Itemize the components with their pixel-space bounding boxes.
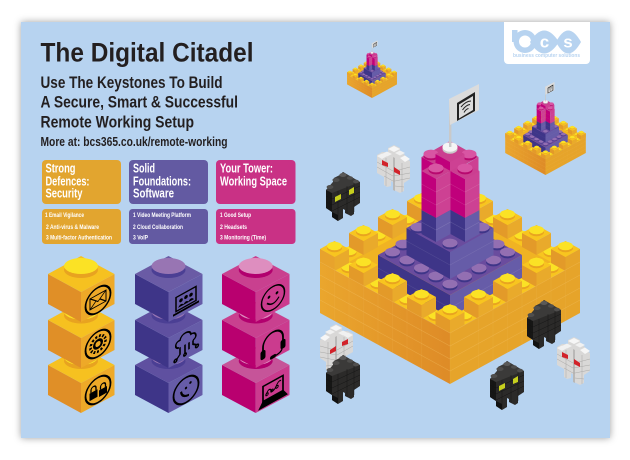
panel: software list: 1 Video Meeting Platform bbox=[133, 213, 191, 219]
panel: security list: 1 Email Vigilance bbox=[45, 213, 85, 219]
panel: security heading: Strong bbox=[46, 162, 76, 176]
small castle: top left bbox=[347, 40, 397, 98]
panel: working space list: 1 Good Setup bbox=[220, 213, 251, 219]
black invader: bottom bbox=[490, 361, 524, 410]
black invader: top left bbox=[326, 172, 360, 221]
main citadel bbox=[320, 84, 580, 384]
purple keystone stack bbox=[135, 256, 202, 413]
subtitle: Use The Keystones To Build bbox=[40, 74, 222, 92]
more-at link: More at: bcs365.co.uk/remote-working bbox=[40, 135, 228, 149]
panel: working space heading bbox=[216, 160, 296, 204]
small castle: right bbox=[505, 82, 586, 175]
black invader: right bbox=[527, 300, 561, 349]
panel: working space list: 3 Monitoring (Time) bbox=[220, 236, 266, 242]
icon: VoIP phone bbox=[174, 371, 198, 409]
subtitle: Remote Working Setup bbox=[40, 114, 194, 132]
orange keystone stack bbox=[48, 256, 114, 413]
panel: working space heading: Working Space bbox=[220, 175, 287, 189]
panel: software heading: Foundations: bbox=[133, 175, 191, 189]
panel: software heading: Solid bbox=[133, 162, 155, 176]
black invader: bottom left bbox=[326, 355, 360, 404]
panel: software heading: Software bbox=[133, 187, 174, 201]
icon: gear bbox=[86, 325, 110, 363]
panel: security heading bbox=[42, 160, 121, 204]
white invader: left bbox=[320, 324, 353, 372]
title: The Digital Citadel bbox=[40, 38, 254, 68]
logo bbox=[504, 22, 590, 64]
subtitle bbox=[40, 74, 238, 132]
logo strapline: business computer solutions bbox=[513, 53, 580, 59]
white invader: right bbox=[557, 337, 590, 385]
panel: software heading bbox=[129, 160, 208, 204]
panel: security list bbox=[42, 209, 121, 244]
panel: software list: 3 VoIP bbox=[133, 236, 148, 242]
icon: video meeting laptop bbox=[173, 285, 199, 316]
panel: security heading: Defences: bbox=[46, 175, 90, 189]
icon: cloud collaboration bbox=[174, 326, 198, 363]
panel: software list bbox=[129, 209, 208, 244]
logo mark: c bbox=[540, 32, 549, 52]
logo mark: s bbox=[563, 32, 573, 52]
icon: envelope bbox=[86, 281, 110, 319]
icon: smiley bbox=[262, 280, 284, 316]
logo mark bbox=[512, 30, 581, 54]
panel: working space heading: Your Tower: bbox=[220, 162, 273, 176]
panel: security list: 2 Anti-virus & Malware bbox=[46, 225, 100, 231]
panel: software list: 2 Cloud Collaboration bbox=[133, 225, 183, 231]
panel: working space list: 2 Headsets bbox=[220, 225, 248, 231]
icon: padlocks bbox=[86, 371, 110, 409]
icon: monitoring laptop bbox=[259, 373, 287, 410]
magenta keystone stack bbox=[222, 256, 290, 413]
icon: headset bbox=[260, 325, 286, 365]
panel: security list: 3 Multi-factor Authentication bbox=[46, 236, 112, 242]
panel: security heading: Security bbox=[46, 187, 83, 201]
subtitle: A Secure, Smart & Successful bbox=[40, 94, 238, 112]
white invader: top bbox=[377, 145, 410, 193]
panel: working space list bbox=[216, 209, 296, 244]
